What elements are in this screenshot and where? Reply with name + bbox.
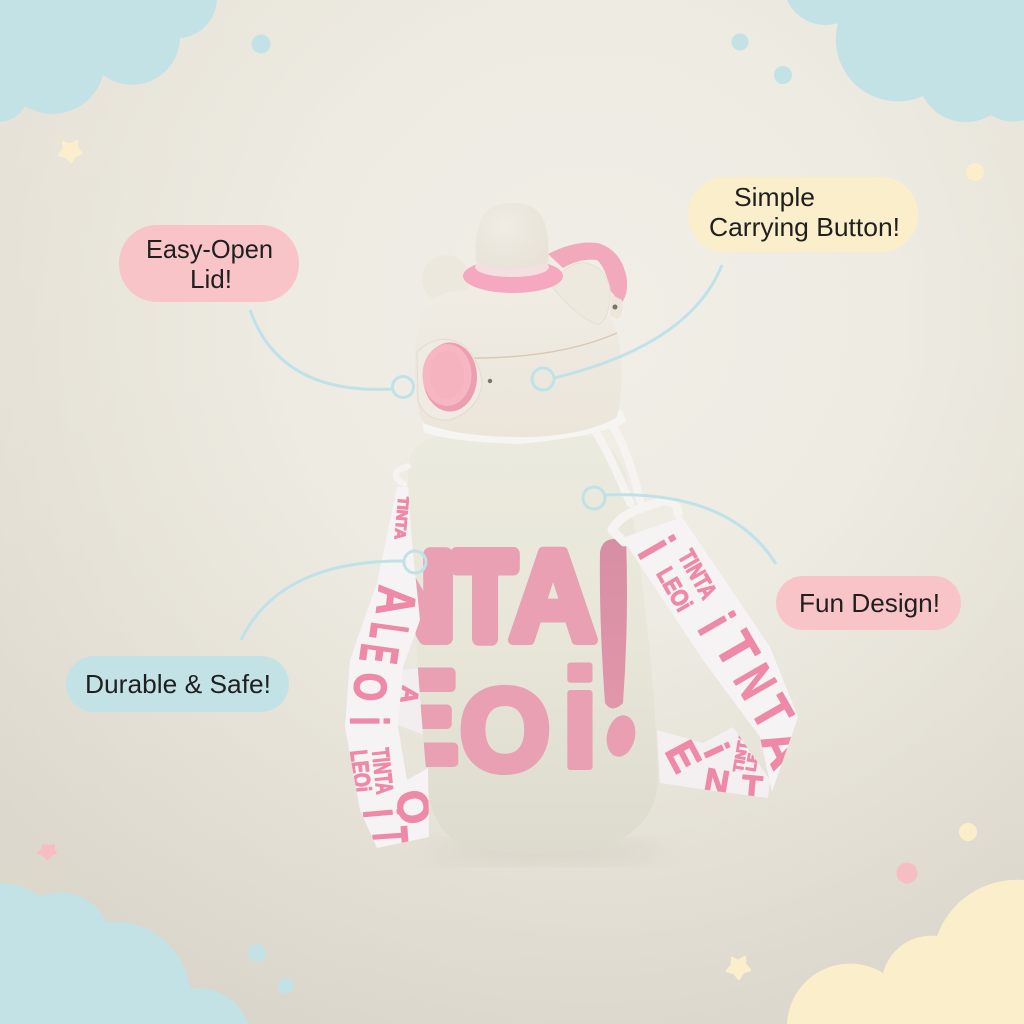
- callout: Easy-Open Lid: Lid!: [190, 264, 232, 294]
- lid button: [422, 342, 477, 412]
- strap: left: T: [362, 825, 418, 847]
- strap: right: T: [739, 687, 804, 739]
- connector: Durable and Safe: [241, 551, 426, 640]
- bottle print: A: [510, 526, 596, 668]
- back strap: right lower loop: TINTA: [730, 731, 752, 773]
- strap: right: N: [722, 655, 788, 708]
- back strap: right lower loop: T: [740, 768, 764, 808]
- screw: [488, 379, 492, 383]
- tab: right side: [610, 295, 622, 319]
- strap: right: [626, 517, 798, 792]
- strap: right: i: [686, 603, 745, 644]
- bottle print: O: [460, 665, 550, 795]
- back strap: right lower loop: i: [696, 737, 737, 763]
- lid base ring: [421, 410, 626, 444]
- lid: [415, 288, 622, 437]
- callout: Durable and Safe: [66, 656, 289, 712]
- strap: right: LEOi: [651, 563, 697, 616]
- carry handle: [548, 242, 627, 304]
- callout: Simple Carrying Button: Carrying Button!: [709, 212, 900, 242]
- ear: left: [422, 255, 470, 303]
- strap: left: A: [364, 583, 427, 619]
- strap: left: TINTA: [366, 747, 398, 795]
- callout: Fun Design: [776, 576, 961, 630]
- button recess: [417, 339, 482, 420]
- strap: right: TINTA: [672, 545, 722, 604]
- strap: left: [345, 487, 429, 848]
- back strap: left inner: [394, 668, 424, 735]
- strap: right: i: [626, 527, 685, 568]
- lid seam: [473, 333, 617, 358]
- cloud: top right: [787, 0, 1024, 122]
- cloud: top left: [0, 0, 217, 122]
- lid top knob: [463, 203, 563, 293]
- strap: left: TINTA: [391, 496, 411, 540]
- callout: Easy-Open Lid: Easy-Open: [146, 234, 273, 264]
- ear: right: [553, 263, 610, 325]
- callout: Fun Design: Fun Design!: [799, 588, 940, 618]
- connector: Simple Carrying Button: [532, 265, 722, 390]
- bottle shadow: [425, 845, 665, 859]
- back strap: right lower loop: [657, 727, 770, 798]
- strap: right: T: [704, 621, 771, 677]
- bottle print: T: [455, 529, 515, 665]
- cloud: bottom left: [0, 883, 248, 1024]
- strap: left: O: [385, 785, 440, 829]
- cloud: bottom right: [787, 880, 1024, 1024]
- bottle print: E: [372, 644, 458, 790]
- connector: Fun Design: [583, 487, 776, 564]
- back strap: right lower loop: LEOi: [742, 738, 764, 772]
- bottle print: N: [366, 528, 454, 664]
- strap: left: E: [347, 641, 410, 667]
- strap: right: A: [749, 720, 815, 777]
- bottle print: i: [561, 640, 599, 797]
- connector: Easy-Open Lid: [250, 310, 414, 398]
- callout: Durable and Safe: Durable & Safe!: [85, 669, 271, 699]
- back strap: right lower loop: N: [701, 761, 732, 803]
- strap: left: i: [351, 806, 411, 820]
- strap: left: L: [357, 619, 419, 644]
- callout: Simple Carrying Button: [688, 177, 918, 252]
- back strap: right lower loop: E: [656, 733, 711, 780]
- strap: left: i: [338, 716, 398, 726]
- bottle print: [416, 538, 636, 775]
- callout: Easy-Open Lid: [119, 225, 299, 302]
- strap: left: LEOi: [344, 749, 375, 793]
- back strap: left inner: A: [394, 684, 424, 706]
- callout: Simple Carrying Button: Simple: [734, 182, 815, 212]
- bottle body: [416, 538, 658, 836]
- strap clips: [396, 425, 678, 542]
- strap: left: O: [344, 672, 397, 702]
